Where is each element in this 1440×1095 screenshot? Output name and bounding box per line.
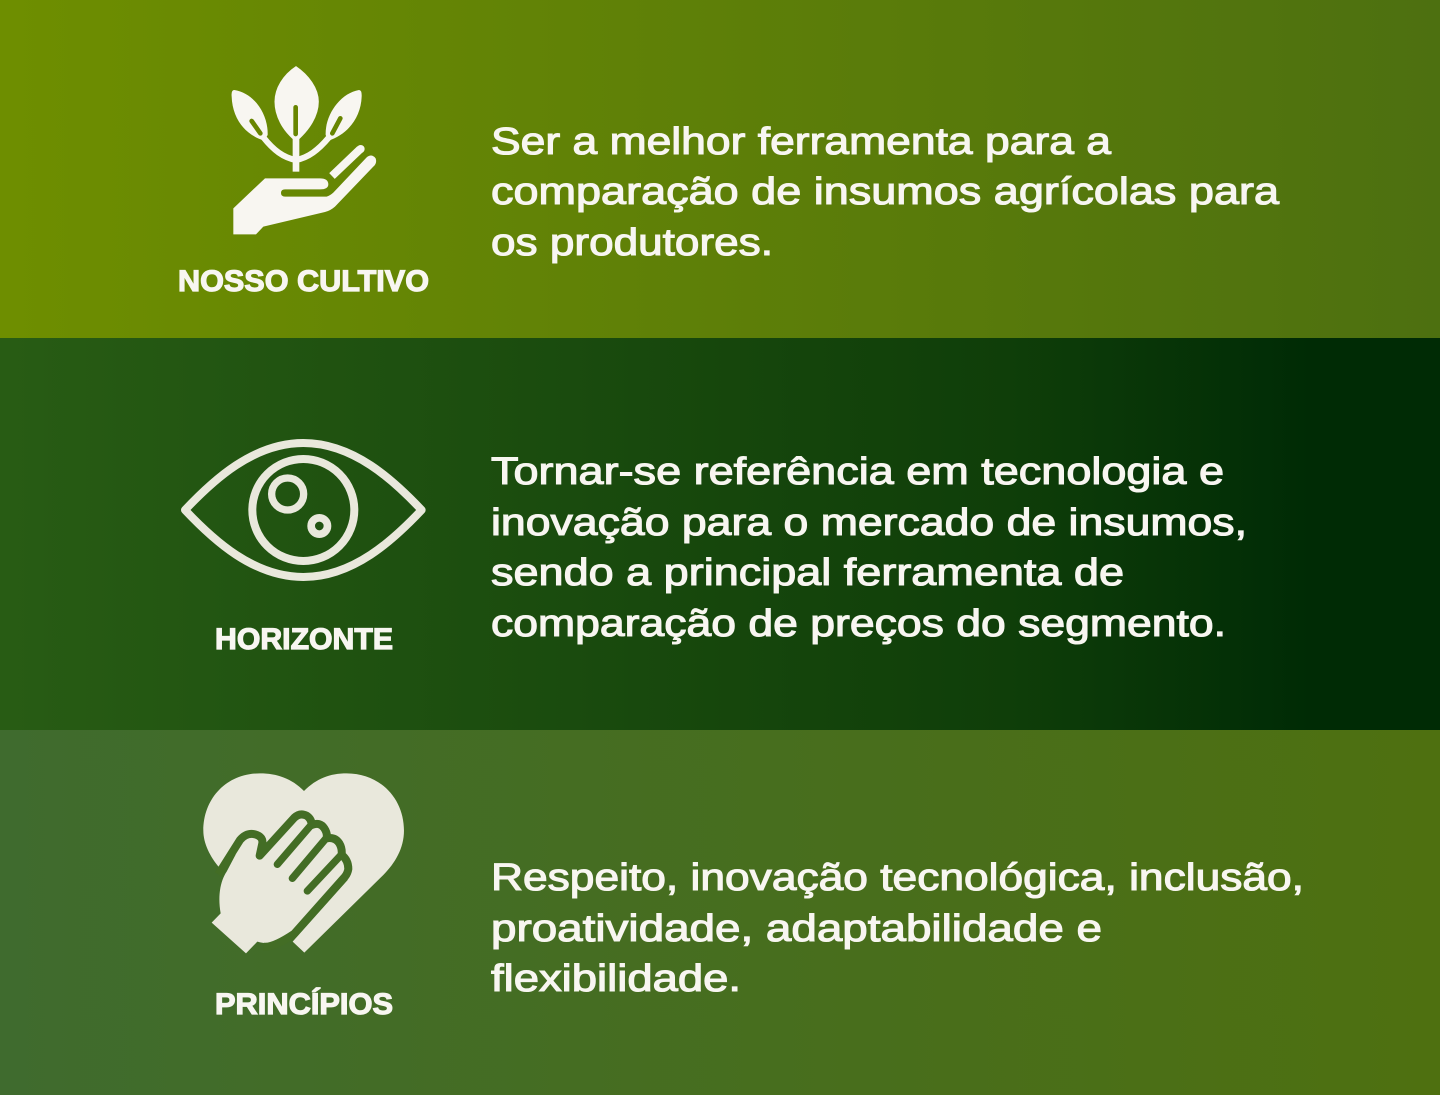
panel: nosso cultivo [0, 0, 1440, 338]
text: principios description: proatividade, adaptabilidade e [491, 908, 1102, 950]
text: horizonte description: Tornar-se referência em tecnologia e [491, 451, 1224, 493]
text: horizonte description: inovação para o mercado de insumos, [491, 502, 1247, 544]
panel: principios [0, 730, 1440, 1095]
icon: hand holding plant [232, 67, 376, 234]
text: nosso cultivo description [491, 121, 1280, 264]
text: nosso cultivo description: os produtores. [491, 222, 773, 264]
text: horizonte description: sendo a principal ferramenta de [491, 552, 1124, 594]
text: nosso cultivo description: Ser a melhor ferramenta para a [491, 121, 1112, 163]
text: horizonte description: comparação de preços do segmento. [491, 603, 1226, 645]
label: horizonte: HORIZONTE [215, 623, 393, 656]
text: nosso cultivo description: comparação de insumos agrícolas para [491, 171, 1280, 213]
text: principios description: Respeito, inovação tecnológica, inclusão, [491, 857, 1304, 899]
label: nosso cultivo: NOSSO CULTIVO [178, 265, 429, 298]
label: principios: PRINCÍPIOS [215, 987, 393, 1021]
text: principios description: flexibilidade. [491, 958, 741, 1000]
panel: horizonte [0, 338, 1440, 730]
text: principios description [491, 857, 1304, 1000]
icon: eye [185, 443, 422, 577]
icon: hand on heart [203, 773, 404, 953]
text: horizonte description [491, 451, 1247, 645]
